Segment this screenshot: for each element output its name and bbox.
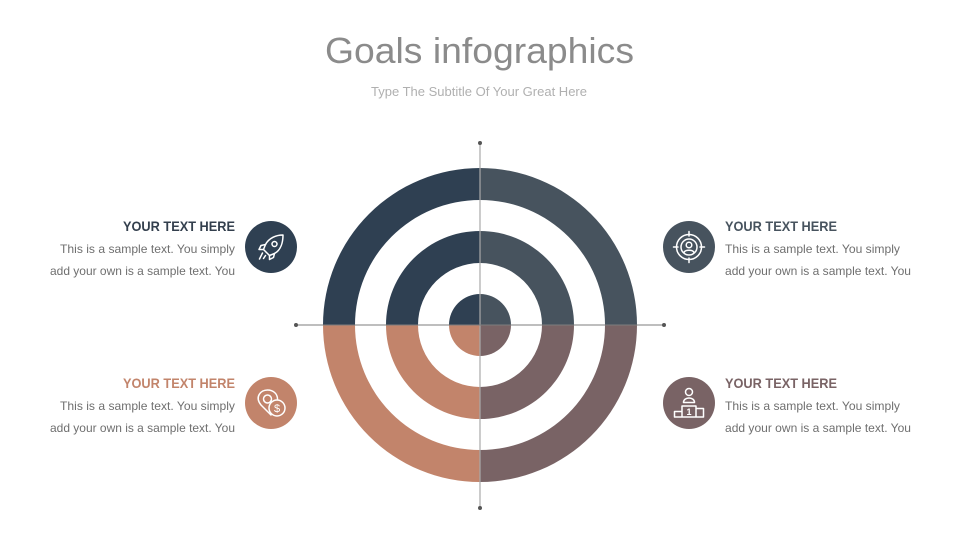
panel: top left goal: [50, 218, 297, 278]
quadrant: top left rings: [323, 168, 480, 325]
text block: [725, 399, 911, 435]
icon: podium with winner: [663, 377, 715, 429]
heading: YOUR TEXT HERE: [123, 375, 235, 391]
text block: [50, 399, 235, 435]
panel: bottom left goal: [50, 375, 297, 435]
quadrant: bottom left rings: [323, 325, 480, 482]
horizontal axis with end dots: [294, 323, 666, 327]
text block: This is a sample text. You simply: [725, 399, 900, 413]
heading: YOUR TEXT HERE: [725, 218, 837, 234]
icon: location pin with dollar coin: [245, 377, 297, 429]
panel: bottom right goal: [663, 375, 911, 435]
text block: This is a sample text. You simply: [725, 242, 900, 256]
icon: location pin with dollar coin: $: [274, 403, 280, 415]
concentric target chart: [323, 168, 637, 482]
quadrant: bottom right rings: [480, 325, 637, 482]
text block: add your own is a sample text. You: [50, 421, 235, 435]
text block: [725, 242, 911, 278]
icon: target with person: [663, 221, 715, 273]
vertical axis with end dots: [478, 141, 482, 510]
text block: This is a sample text. You simply: [60, 399, 235, 413]
quadrant: top right rings: [480, 168, 637, 325]
text block: add your own is a sample text. You: [50, 264, 235, 278]
text block: add your own is a sample text. You: [725, 264, 911, 278]
title: Goals infographics: [325, 30, 634, 71]
text block: [50, 242, 235, 278]
text block: add your own is a sample text. You: [725, 421, 911, 435]
text block: This is a sample text. You simply: [60, 242, 235, 256]
icon: podium with winner: 1: [686, 407, 692, 417]
heading: YOUR TEXT HERE: [123, 218, 235, 234]
subtitle: Type The Subtitle Of Your Great Here: [371, 84, 587, 99]
panel: top right goal: [663, 218, 911, 278]
heading: YOUR TEXT HERE: [725, 375, 837, 391]
icon: rocket: [245, 221, 297, 273]
